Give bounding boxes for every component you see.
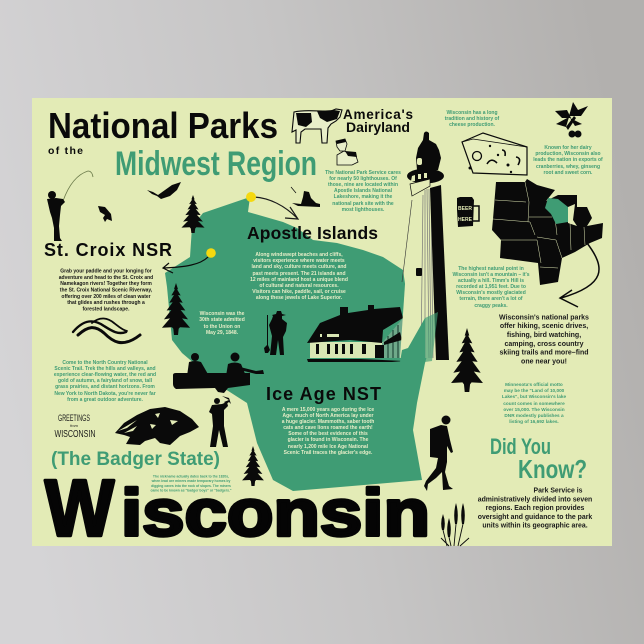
text: dairy exports: Known for her dairy <box>544 145 592 151</box>
text: dairy exports: cranberries, whey, ginseng <box>536 164 600 170</box>
text: North Country <box>54 360 156 403</box>
text: North Country: Come to the North Country National <box>62 360 148 366</box>
text: lakes <box>502 382 567 424</box>
text: Ice Age: Age, much of North America lay under <box>283 413 374 419</box>
text: lighthouses: national park site with the <box>332 201 394 207</box>
text: North Country: Scenic Trail. Trek the hills and valleys, and <box>54 366 156 372</box>
tree: western <box>162 283 190 335</box>
text: cheese: tradition and history of <box>445 116 500 122</box>
text: badger nickname: digging caves into the rock of slopes. The miners <box>151 484 231 488</box>
text: badger nickname: The nickname actually dates back to the 1820s, <box>153 474 229 478</box>
arrow: map to parks list <box>560 243 599 307</box>
text: Apostle Islands: land and sky, culture meets culture, and <box>252 264 346 270</box>
text: Ice Age: glacier is found in Wisconsin. The <box>288 437 369 443</box>
text: Apostle Islands: visitors experience where water meets <box>253 258 345 264</box>
icon: badger <box>115 407 199 445</box>
title: Wisconsin: W <box>45 464 114 552</box>
subtitle: of the: of the <box>48 145 83 157</box>
text: national parks activities: skiing trails and more–find <box>499 350 589 356</box>
icon: waves <box>73 318 140 343</box>
text: park service regions: regions. Each region provides <box>486 505 585 512</box>
text: national parks activities: one near you! <box>521 358 567 366</box>
text: cheese: Wisconsin has a long <box>446 110 498 116</box>
text: lighthouses: those, nine are located within <box>328 182 398 188</box>
heading: Did You Know?: Know? <box>518 454 587 484</box>
text: St. Croix: offering over 200 miles of clean water <box>61 294 151 300</box>
text: St. Croix: the St. Croix National Scenic Riverway, <box>60 288 153 294</box>
text: national parks activities: offer hiking, scenic drives, <box>500 323 588 330</box>
text: Ice Age: A mere 15,000 years ago during the Ice <box>282 407 374 413</box>
text: park service regions: units within its geographic area. <box>482 522 588 530</box>
title: National Parks: National Parks <box>48 105 278 146</box>
icon: cattail reeds <box>441 503 469 546</box>
text: North Country: from a great outdoor adventure. <box>67 397 144 403</box>
text: national parks activities: camping, cross country <box>505 341 584 348</box>
text: St. Croix <box>59 268 153 312</box>
text: Timms Hill: terrain, there aren't a lot of <box>459 296 523 302</box>
text: national parks activities <box>499 314 589 366</box>
tree: northern <box>181 195 205 233</box>
text: statehood: to the Union on <box>204 324 240 330</box>
text: dairy exports <box>533 145 603 176</box>
text: Apostle Islands: 12 miles of mainland host a unique blend <box>250 277 348 283</box>
text: lighthouses: for nearly 50 lighthouses. Of <box>329 176 397 182</box>
marker: St. Croix <box>163 248 216 273</box>
icon: farmer bust <box>336 139 358 165</box>
text: dairy exports: root and sweet corn. <box>544 170 593 176</box>
heading: America's Dairyland: Dairyland <box>346 120 410 135</box>
text: Ice Age: cats and cave lions roamed the earth! <box>283 425 373 431</box>
heading: Ice Age NST: Ice Age NST <box>266 384 381 404</box>
icon: hiker <box>424 416 453 491</box>
text: Ice Age: a huge glacier. Mammoths, saber tooth <box>282 419 374 425</box>
text: St. Croix: that glides and rushes through a <box>67 300 145 306</box>
text: badger nickname <box>150 474 232 492</box>
text: St. Croix: forested landscape. <box>83 306 130 312</box>
text: Apostle Islands: of cultural and natural resources. <box>259 283 339 289</box>
tree: southern <box>242 446 264 486</box>
icon: beer mug: HERE <box>458 217 473 223</box>
text: Timms Hill: The highest natural point in <box>458 266 524 272</box>
heading: Apostle Islands: Apostle Islands <box>247 223 378 243</box>
logo: Greetings from Wisconsin: GREETINGS <box>58 413 90 423</box>
text: Timms Hill <box>452 266 530 309</box>
tree: eastern <box>451 328 483 392</box>
text: statehood: 30th state admitted <box>199 317 245 323</box>
text: dairy exports: leads the nation in exports of <box>533 157 603 163</box>
text: statehood: Wisconsin was the <box>200 311 245 317</box>
text: Timms Hill: craggy peaks. <box>474 303 508 309</box>
text: lighthouses <box>325 170 401 213</box>
text: Timms Hill: actually a hill. Timm's Hill is <box>458 278 524 284</box>
icon: cranberries <box>555 102 588 138</box>
text: lakes: may be the "Land of 10,000 <box>504 388 565 393</box>
map: Wisconsin <box>165 197 440 491</box>
text: national parks activities: Wisconsin's national parks <box>499 314 589 322</box>
text: Ice Age: Scenic Trail traces the glacier's edge. <box>284 450 373 456</box>
text: national parks activities: fishing, bird watching, <box>507 332 581 339</box>
text: St. Croix: Grab your paddle and your longing for <box>60 268 152 274</box>
heading: The Badger State: (The Badger State) <box>51 449 220 470</box>
heading: St. Croix NSR: St. Croix NSR <box>44 240 172 260</box>
text: park service regions: administratively divided into seven <box>478 496 592 504</box>
icon: cheese wedge <box>462 133 527 175</box>
text: lighthouses: Lakeshore, making it the <box>334 194 393 200</box>
icon: miner with pick <box>209 396 231 447</box>
text: St. Croix: Namekagon rivers! Together they form <box>60 281 152 287</box>
text: lakes: Minnesota's official motto <box>505 382 563 387</box>
text: Apostle Islands: Visitors can hike, paddle, sail, or cruise <box>252 289 346 295</box>
logo: Greetings from Wisconsin: from <box>70 423 79 428</box>
text: North Country: New York to North Dakota, you're never far <box>54 391 156 397</box>
icon: cow <box>292 109 342 143</box>
text: Ice Age <box>282 407 374 456</box>
title: Wisconsin <box>45 464 430 552</box>
text: park service regions <box>478 488 592 530</box>
icon: lighthouse <box>400 132 449 362</box>
text: Ice Age: nearly 1,200 mile Ice Age National <box>288 444 369 450</box>
icon: eagle <box>147 182 181 199</box>
text: Apostle Islands <box>250 252 348 301</box>
text: North Country: grass prairies, and distant horizons. From <box>55 384 155 390</box>
icon: ranger with shovel <box>264 311 287 355</box>
text: statehood <box>199 311 245 336</box>
logo: Greetings from Wisconsin <box>54 413 96 440</box>
marker: Apostle Islands <box>246 192 298 219</box>
text: lakes: DNR modestly publishes a <box>504 413 564 418</box>
text: Timms Hill: Wisconsin's mostly glaciated <box>456 290 526 296</box>
text: cheese <box>445 110 500 128</box>
text: dairy exports: production, Wisconsin also <box>535 151 601 157</box>
text: badger nickname: when lead ore miners made temporary homes by <box>151 479 230 483</box>
icon: beer mug: BEER <box>458 206 472 212</box>
heading: Did You Know?: Did You <box>490 434 551 459</box>
icon: beer mug <box>457 197 479 227</box>
heading: America's Dairyland: America's <box>343 107 413 122</box>
text: Apostle Islands: along these jewels of Lake Superior. <box>256 295 343 301</box>
text: lakes: Lakes", but Wisconsin's lake <box>502 394 567 399</box>
text: park service regions: Park Service is <box>533 488 583 494</box>
text: North Country: gold of autumn, a fairyland of snow, tall <box>58 378 153 384</box>
icon: canoe with paddlers <box>173 352 264 393</box>
text: lakes: listing of 16,692 lakes. <box>509 419 559 424</box>
text: lakes: over 15,000. The Wisconsin <box>503 407 565 412</box>
text: Apostle Islands: Along windswept beaches and cliffs, <box>255 252 343 258</box>
text: lighthouses: most lighthouses. <box>342 207 385 213</box>
title: Midwest Region: Midwest Region <box>115 145 317 183</box>
logo: Greetings from Wisconsin: WISCONSIN <box>54 429 96 440</box>
text: Apostle Islands: past meets present. The 21 islands and <box>252 271 346 277</box>
text: lakes: count comes in somewhere <box>503 401 565 406</box>
text: North Country: experience clear-flowing water, the red and <box>54 372 156 378</box>
icon: kayaker <box>291 187 320 207</box>
text: cheese: cheese production. <box>449 122 496 128</box>
map: Midwest region <box>492 179 603 285</box>
text: St. Croix: adventure and head to the St. Croix and <box>59 275 153 281</box>
text: statehood: May 29, 1848. <box>206 330 239 336</box>
heading: America's Dairyland <box>343 107 413 135</box>
icon: fisherman <box>47 171 93 241</box>
text: lighthouses: The National Park Service cares <box>325 170 401 176</box>
text: Timms Hill: Wisconsin isn't a mountain – it's <box>452 272 530 278</box>
title: Wisconsin: isconsin <box>121 476 430 550</box>
poster panel <box>32 98 612 546</box>
icon: fish <box>98 206 112 222</box>
text: Ice Age: Some of the best evidence of this <box>288 431 368 437</box>
text: badger nickname: came to be known as "badger boys" or "badgers." <box>150 488 232 492</box>
text: park service regions: oversight and guidance to the park <box>478 514 592 521</box>
text: Timms Hill: recorded at 1,951 feet. Due to <box>456 284 526 290</box>
heading: Did You Know? <box>490 434 587 484</box>
icon: cabin <box>307 305 404 362</box>
text: lighthouses: Apostle Islands National <box>334 188 393 194</box>
